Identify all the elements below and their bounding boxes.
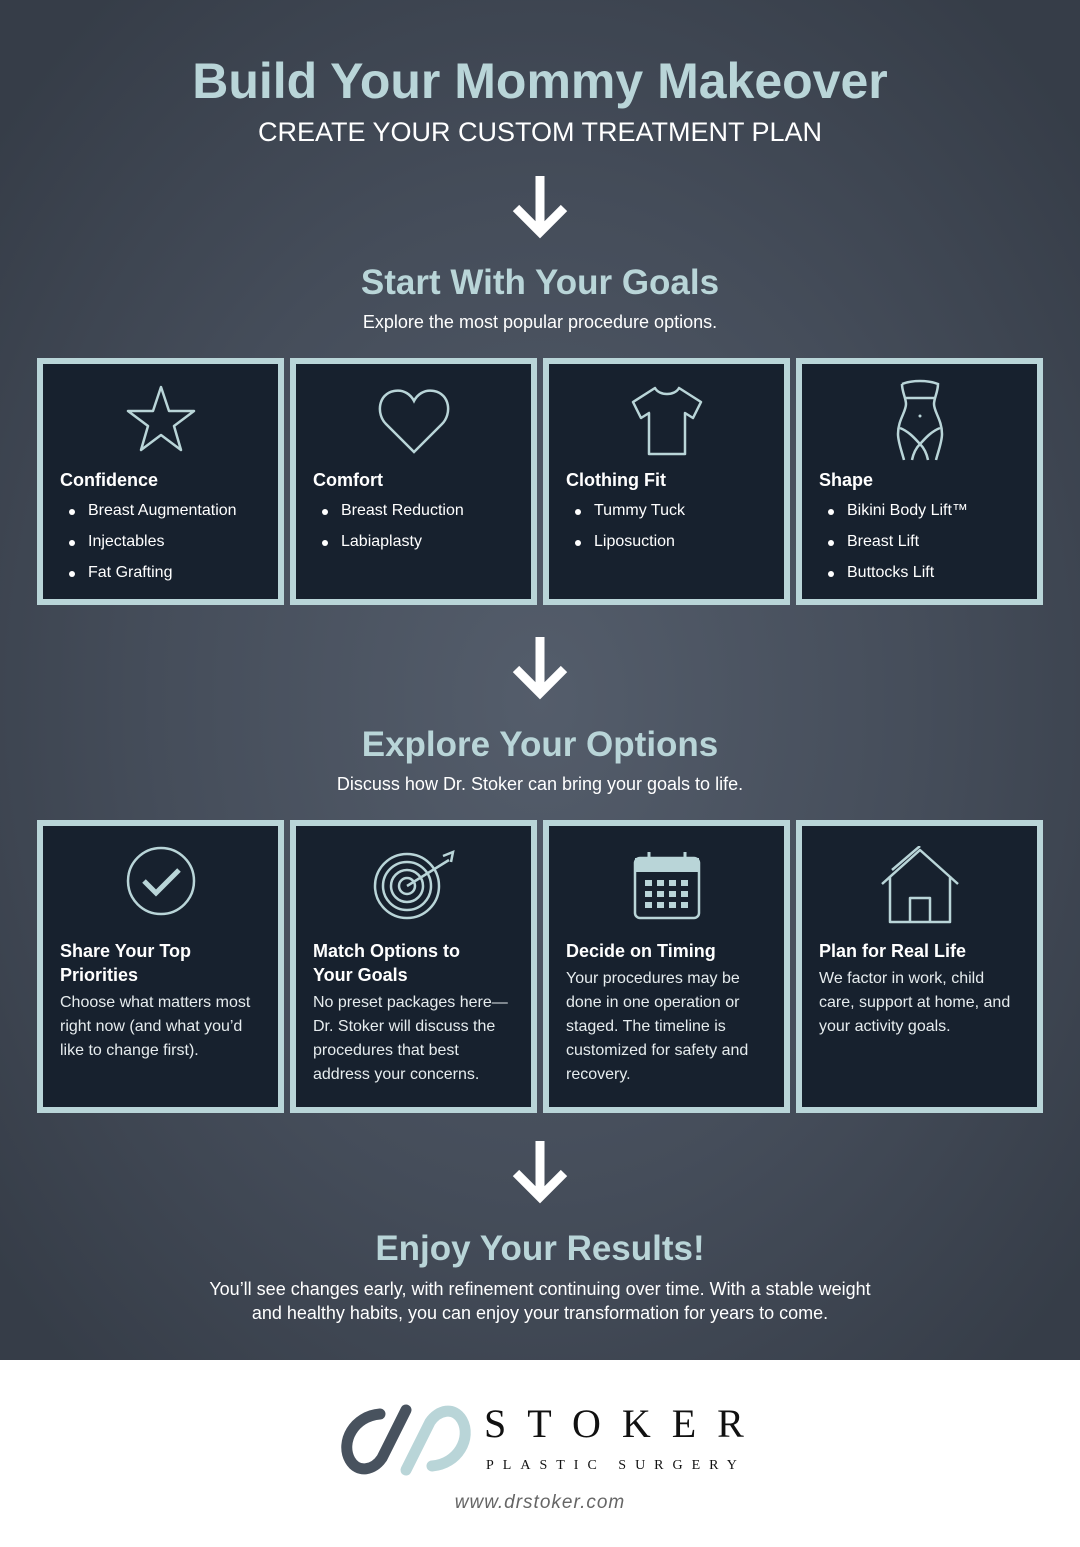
arrow 2 (512, 637, 568, 700)
panel: shape: Bikini Body Lift™ (847, 502, 968, 519)
icon: check circle (126, 846, 196, 916)
panel: match options: Your Goals (313, 965, 408, 985)
icon: heart (378, 389, 450, 454)
panel: timing: Decide on Timing (566, 941, 716, 961)
text: start intro: Explore the most popular procedure options. (363, 312, 717, 332)
panel: confidence: Confidence (60, 470, 158, 490)
panel: clothing fit (543, 358, 790, 605)
icon: star (126, 386, 196, 452)
logo (341, 1401, 765, 1476)
panel: comfort: Labiaplasty (341, 533, 422, 550)
subtitle: CREATE YOUR CUSTOM TREATMENT PLAN (258, 117, 822, 147)
icon: shirt (632, 386, 702, 456)
panel: real life: We factor in work, child care, support at home, and your activity goals. (819, 970, 1010, 1035)
heading: start with goals: Start With Your Goals (361, 263, 719, 302)
panel: clothing fit: Clothing Fit (566, 470, 666, 490)
panel: real life: Plan for Real Life (819, 941, 966, 961)
panel: timing: Your procedures may be done in one operation or staged. The timeline is customized for safety and recovery. (566, 970, 748, 1083)
panel: priorities: Choose what matters most right now (and what you’d like to change first). (60, 994, 250, 1059)
text: explore intro: Discuss how Dr. Stoker can bring your goals to life. (337, 774, 743, 794)
panel: shape: Shape (819, 470, 873, 490)
panel: priorities: Share Your Top (60, 941, 191, 961)
panel: shape (796, 358, 1043, 605)
arrow 1 (512, 176, 568, 238)
website: www.drstoker.com (455, 1492, 625, 1513)
icon: calendar (634, 852, 700, 920)
text: results (209, 1279, 871, 1323)
logo mark (341, 1404, 471, 1476)
panel: confidence (37, 358, 284, 605)
heading: enjoy results: Enjoy Your Results! (375, 1229, 705, 1268)
arrow 3 (512, 1141, 568, 1204)
title: Build Your Mommy Makeover (192, 53, 888, 109)
panel: clothing fit: Liposuction (594, 533, 675, 550)
panel: shape: Buttocks Lift (847, 564, 934, 581)
icon: target (374, 850, 455, 920)
panel: comfort (290, 358, 537, 605)
logo: PLASTIC SURGERY (486, 1458, 746, 1473)
panel: confidence: Injectables (88, 533, 164, 550)
panel: shape: Breast Lift (847, 533, 919, 550)
heading: explore options: Explore Your Options (362, 725, 718, 764)
logo text: STOKER (484, 1401, 765, 1446)
panel: match options: Match Options to (313, 941, 460, 961)
panel: timing (543, 820, 790, 1113)
panel: priorities: Priorities (60, 965, 138, 985)
text: results: and healthy habits, you can enjoy your transformation for years to come. (252, 1303, 828, 1323)
panel: match options (290, 820, 537, 1113)
text: results: You’ll see changes early, with refinement continuing over time. With a stable weight (209, 1279, 871, 1299)
icon: house (881, 846, 959, 924)
icon: body (896, 380, 944, 460)
panel: comfort: Comfort (313, 470, 383, 490)
panel: confidence: Breast Augmentation (88, 502, 237, 519)
panel: priorities (37, 820, 284, 1113)
panel: real life (796, 820, 1043, 1113)
panel: match options: No preset packages here—Dr. Stoker will discuss the procedures that best address your concerns. (313, 994, 508, 1083)
panel: clothing fit: Tummy Tuck (594, 502, 685, 519)
panel: confidence: Fat Grafting (88, 564, 172, 581)
panel: comfort: Breast Reduction (341, 502, 464, 519)
